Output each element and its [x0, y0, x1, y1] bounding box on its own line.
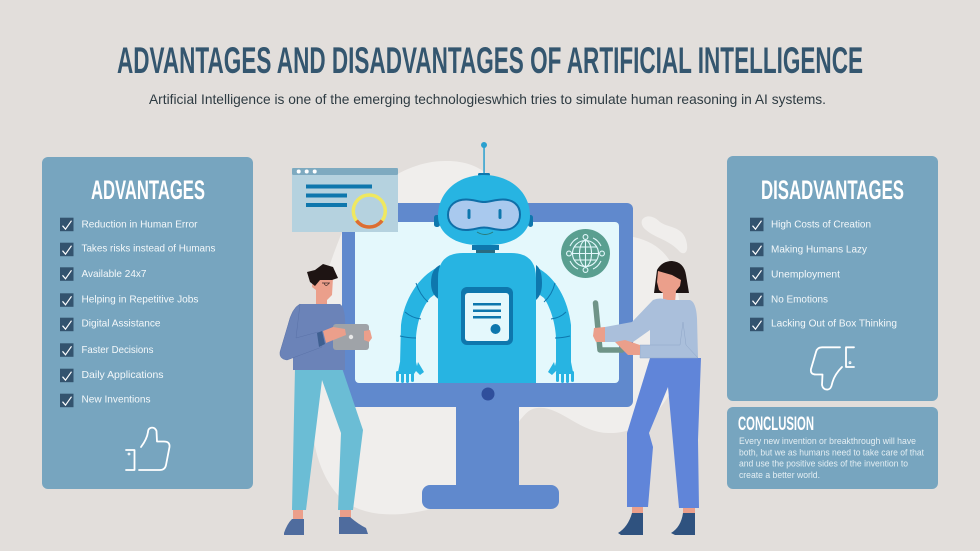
robot — [396, 142, 574, 383]
list: disadvantages: High Costs of Creation — [771, 218, 871, 230]
robot body — [438, 253, 536, 383]
woman face — [657, 271, 681, 303]
window card with ring chart — [292, 168, 398, 232]
woman sweater — [605, 298, 698, 358]
monitor stand — [422, 400, 559, 509]
man ankles — [293, 510, 351, 519]
small blob — [642, 216, 687, 253]
text: conclusion body — [739, 436, 924, 480]
woman hands — [593, 327, 640, 355]
list: disadvantages: Making Humans Lazy — [771, 244, 868, 256]
woman hair — [654, 261, 689, 293]
man torso — [293, 304, 345, 370]
robot antenna — [478, 142, 490, 176]
list: disadvantages: No Emotions — [771, 294, 828, 306]
icon: globe — [561, 229, 610, 278]
list: disadvantages — [750, 218, 897, 331]
robot left arm — [396, 265, 440, 383]
robot neck — [472, 245, 499, 253]
robot chest panel — [461, 287, 513, 345]
subtitle: Artificial Intelligence is one of the emerging technologieswhich tries to simulate human reasoning in AI systems. — [149, 91, 826, 107]
man with tablet — [280, 264, 372, 535]
woman ankles — [632, 507, 695, 514]
icon: thumbs down — [811, 347, 854, 390]
panel: disadvantages — [727, 156, 938, 401]
text: conclusion body: Every new invention or breakthrough will have — [739, 436, 916, 446]
background blob — [312, 161, 683, 514]
list: advantages: Helping in Repetitive Jobs — [82, 294, 198, 306]
woman boots — [618, 513, 695, 535]
monitor — [342, 203, 633, 407]
man neck and face — [312, 277, 333, 305]
list: advantages: Faster Decisions — [82, 344, 154, 356]
text: conclusion body: create a better world. — [739, 470, 820, 480]
woman legs — [627, 358, 701, 508]
text: conclusion body: and use the positive sides of the invention to — [739, 459, 908, 469]
list: advantages — [60, 218, 216, 407]
man sleeve — [280, 304, 322, 360]
list: advantages: Takes risks instead of Humans — [82, 242, 216, 254]
illustration: AI robot on monitor with people — [280, 142, 701, 535]
list: advantages: Digital Assistance — [82, 318, 161, 330]
list: advantages: New Inventions — [82, 394, 150, 406]
woman sleeve — [640, 322, 698, 358]
man shoes — [284, 517, 368, 535]
robot head — [434, 175, 533, 245]
robot right arm — [536, 265, 574, 383]
man cuff — [317, 331, 325, 347]
man glasses — [322, 283, 330, 286]
panel: conclusion — [727, 407, 938, 489]
panel: advantages — [42, 157, 253, 489]
list: advantages: Available 24x7 — [82, 268, 147, 280]
woman with tablet — [593, 261, 701, 535]
list: disadvantages: Lacking Out of Box Thinking — [771, 318, 897, 330]
man hands — [323, 327, 372, 343]
heading: advantages: ADVANTAGES — [91, 175, 205, 205]
tablet — [333, 324, 369, 350]
heading: conclusion: CONCLUSION — [738, 414, 814, 435]
man legs — [292, 368, 363, 510]
list: disadvantages: Unemployment — [771, 268, 840, 280]
list: advantages: Daily Applications — [82, 369, 164, 381]
man hair — [307, 264, 338, 286]
icon: thumbs up — [126, 428, 170, 470]
list: advantages: Reduction in Human Error — [82, 218, 198, 230]
tablet L-shape — [596, 303, 622, 350]
text: conclusion body: both, but we as humans need to take care of that — [739, 447, 924, 457]
